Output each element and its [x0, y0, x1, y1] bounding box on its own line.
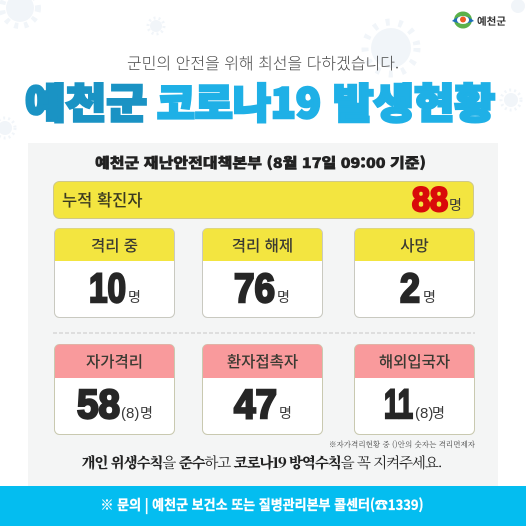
card: released: 76: [234, 265, 275, 311]
card: patient contacts: 명: [279, 403, 292, 423]
card: overseas arrivals: [354, 344, 474, 434]
card: released: [202, 228, 322, 318]
cumulative confirmed bar: 누적 확진자: [62, 187, 143, 211]
title: [25, 70, 495, 130]
footer bar: ※ 문의 | 예천군 보건소 또는 질병관리본부 콜센터(☎1339): [100, 495, 424, 515]
footnote: ※자가격리현황 중 ()안의 숫자는 격리면제자: [329, 439, 476, 450]
card: patient contacts: 환자접촉자: [227, 350, 298, 372]
card: deaths: [354, 228, 474, 318]
logo: Yecheon-gun: [452, 12, 506, 28]
card: patient contacts: 47: [234, 381, 277, 427]
cumulative confirmed bar: [54, 181, 474, 219]
card: in isolation: [54, 228, 174, 318]
card: deaths: 2: [400, 265, 420, 311]
title: 코로나19: [157, 70, 321, 130]
card: self-quarantine: 58: [77, 381, 120, 427]
card: in isolation: 격리 중: [91, 234, 138, 256]
title: 발생현황: [333, 70, 495, 130]
card: overseas arrivals: 명: [432, 403, 445, 423]
card: patient contacts: [202, 344, 322, 434]
card: overseas arrivals: 해외입국자: [379, 350, 450, 372]
card: self-quarantine: 명: [140, 403, 153, 423]
card: self-quarantine: [54, 344, 174, 434]
hygiene message: 개인 위생수칙을 준수하고 코로나19 방역수칙을 꼭 지켜주세요.: [82, 452, 442, 473]
cumulative confirmed bar: 88: [412, 181, 448, 219]
card: deaths: 사망: [400, 234, 429, 256]
card: overseas arrivals: 11: [384, 381, 413, 427]
cumulative confirmed bar: 명: [449, 195, 462, 215]
card: in isolation: 10: [89, 265, 126, 311]
card: in isolation: 명: [128, 287, 141, 307]
panel heading: 예천군 재난안전대책본부 (8월 17일 09:00 기준): [95, 153, 426, 173]
title: 예천군: [25, 70, 147, 130]
card: deaths: 명: [423, 287, 436, 307]
decorative virus motifs: [0, 0, 525, 138]
subtitle: 군민의 안전을 위해 최선을 다하겠습니다.: [127, 50, 399, 74]
card: released: 격리 해제: [232, 234, 293, 256]
logo: Yecheon-gun: 예천군: [477, 13, 506, 28]
card: released: 명: [277, 287, 290, 307]
card: self-quarantine: (8): [121, 405, 139, 422]
footer bar: [0, 486, 526, 526]
card: overseas arrivals: (8): [415, 405, 433, 422]
main panel: [28, 143, 498, 486]
card: self-quarantine: 자가격리: [86, 350, 143, 372]
